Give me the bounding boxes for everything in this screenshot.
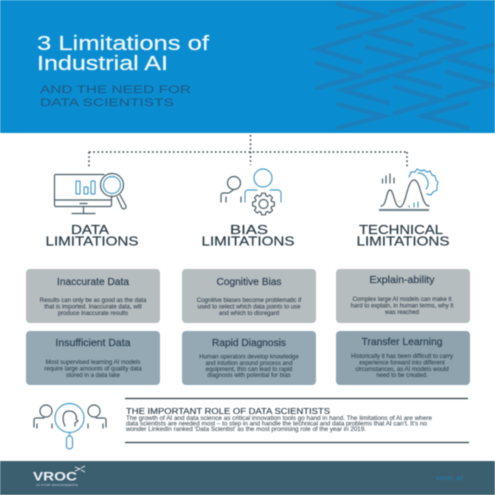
heading: technical limitations — [356, 223, 450, 248]
header banner — [0, 0, 495, 133]
panel: cognitive bias: and which to disregard — [219, 311, 279, 317]
logo: VROC: AI FOR ENGINEERS — [36, 483, 78, 487]
icon: data scientist under magnifier — [34, 404, 106, 449]
heading: bias limitations: BIAS — [230, 223, 268, 237]
panel: transfer learning: experience forward into different — [359, 360, 445, 366]
panel: inaccurate data: produce inaccurate results — [58, 311, 128, 317]
panel: explain-ability: was reached — [384, 310, 419, 316]
title: Industrial AI — [37, 53, 168, 75]
panel: inaccurate data — [26, 269, 160, 323]
panel: inaccurate data: that is imported. Inaccurate data, will — [44, 304, 142, 310]
heading: technical limitations: TECHNICAL — [359, 223, 443, 237]
panel: insufficient data — [26, 331, 160, 385]
panel: inaccurate data: Results can only be as good as the data — [40, 298, 147, 304]
panel: rapid diagnosis — [182, 331, 316, 385]
callout body: wonder LinkedIn ranked ‘Data Scientist’ as the most promising role of the year in 2019. — [125, 427, 366, 433]
panel: rapid diagnosis: and intuition around process and — [205, 361, 293, 367]
subtitle: DATA SCIENTISTS — [40, 97, 174, 109]
panel: rapid diagnosis: equipment, this can lead to rapid — [206, 367, 292, 373]
panel: inaccurate data: Inaccurate Data — [57, 277, 129, 288]
title — [37, 33, 210, 75]
footer link: vroc.ai — [436, 476, 463, 482]
callout body — [125, 416, 433, 433]
panel: transfer learning — [336, 331, 470, 385]
panel: cognitive bias: Cognitive biases become problematic if — [197, 298, 302, 304]
panel: insufficient data: Insufficient Data — [56, 338, 131, 349]
title: 3 Limitations of — [37, 33, 210, 55]
icon: people with gear — [221, 169, 281, 215]
callout: role of data scientists — [125, 398, 469, 442]
panel: insufficient data: stored in a data lake — [66, 373, 121, 379]
heading: technical limitations: LIMITATIONS — [356, 234, 450, 248]
icon: monitor with magnifier — [54, 174, 126, 214]
callout heading: THE IMPORTANT ROLE OF DATA SCIENTISTS — [126, 406, 330, 416]
heading: data limitations: LIMITATIONS — [46, 234, 138, 248]
panel: rapid diagnosis: Human operators develop knowledge — [199, 355, 299, 361]
logo: VROC: VROC — [33, 472, 77, 484]
panel: cognitive bias — [182, 269, 316, 323]
panel: transfer learning: need to be created. — [376, 373, 428, 379]
callout body: data scientists are needed most – to step in and handle the technical and data problems that AI can’t. It’s no — [126, 422, 428, 428]
subtitle: AND THE NEED FOR — [40, 84, 191, 96]
panel: insufficient data: require large amounts of quality data — [44, 366, 142, 372]
panel: transfer learning: Historically it has been difficult to carry — [351, 354, 453, 360]
heading: data limitations — [46, 223, 138, 248]
panel: explain-ability — [336, 269, 470, 323]
panel: rapid diagnosis: diagnosis with potential for bias — [207, 373, 291, 379]
panel: cognitive bias: used to select which data points to use — [197, 304, 301, 310]
icon: waves with gear — [379, 169, 438, 211]
panel: insufficient data: Most supervised learning AI models — [46, 360, 140, 366]
heading: data limitations: DATA — [71, 223, 110, 237]
panel: transfer learning: circumstances, as AI models would — [355, 367, 449, 373]
panel: explain-ability: hard to explain, in human terms, why it — [351, 304, 454, 310]
logo: VROC — [33, 466, 85, 487]
heading: bias limitations: LIMITATIONS — [202, 234, 294, 248]
panel: explain-ability: Explain-ability — [370, 275, 434, 286]
subtitle — [40, 84, 191, 109]
panel: rapid diagnosis: Rapid Diagnosis — [212, 338, 286, 349]
panel: cognitive bias: Cognitive Bias — [216, 277, 282, 288]
heading: bias limitations — [202, 223, 294, 248]
callout body: The growth of AI and data science as critical innovation tools go hand in hand. The limitations of AI are where — [126, 416, 433, 422]
dotted connector — [89, 135, 407, 167]
panel: transfer learning: Transfer Learning — [362, 337, 442, 348]
panel: explain-ability: Complex large AI models can make it — [352, 297, 452, 303]
footer bar — [0, 461, 495, 495]
